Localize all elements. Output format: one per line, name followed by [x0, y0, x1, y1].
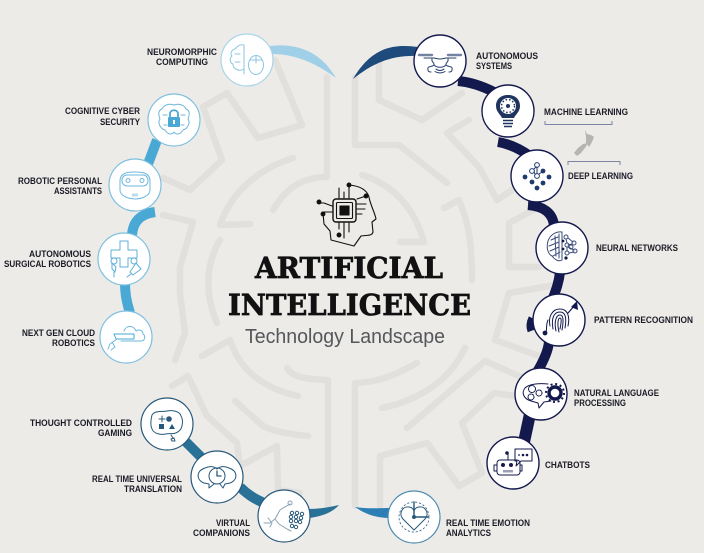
subtitle: Technology Landscape: [245, 326, 445, 348]
heading: Intelligence: INTELLIGENCE: [228, 288, 471, 322]
label: THOUGHT CONTROLLED: [30, 418, 132, 428]
icon: drone: [414, 35, 466, 87]
icon: robot with speech bubble: [487, 437, 539, 489]
icon: cloud and robot arm: [100, 311, 152, 363]
icon: dot network: [511, 150, 563, 202]
node: natural language processing: [515, 368, 659, 420]
label: COGNITIVE CYBER: [65, 106, 140, 116]
icon: medical cross and robot arms: [98, 233, 150, 285]
node: real time emotion analytics: ANALYTICS: [446, 528, 491, 538]
ribbon: light blue neuromorphic arc: [270, 45, 336, 78]
node: next gen cloud robotics: [22, 311, 152, 363]
icon: brain and mouse: [221, 34, 273, 86]
deep learning bracket: [568, 162, 620, 165]
ribbon: navy autonomous arc: [353, 46, 418, 79]
heading: Artificial: ARTIFICIAL: [254, 251, 443, 285]
label: VIRTUAL: [216, 518, 250, 528]
node: natural language processing: PROCESSING: [574, 398, 626, 408]
label: AUTONOMOUS: [476, 51, 538, 61]
node: real time emotion analytics: [388, 491, 530, 543]
label: REAL TIME EMOTION: [446, 518, 530, 528]
ribbon: blue emotion analytics tail: [355, 507, 392, 518]
node: machine learning: [482, 85, 628, 137]
icon: robot face: [109, 159, 161, 211]
node: autonomous surgical robotics: SURGICAL ROBOTICS: [4, 259, 91, 269]
label: DEEP LEARNING: [568, 171, 633, 181]
node: virtual companions: [193, 490, 310, 542]
icon: AI head with chip: [317, 183, 376, 246]
label: ROBOTIC PERSONAL: [18, 176, 102, 186]
ribbon: teal virtual companions tail: [308, 505, 339, 518]
node: neuromorphic computing: [147, 34, 273, 86]
node: robotic personal assistants: ASSISTANTS: [54, 186, 102, 196]
background brain circuit lines: [163, 57, 555, 506]
node: autonomous systems: [414, 35, 538, 87]
label: CHATBOTS: [545, 460, 590, 470]
icon: heart with clock hands: [388, 491, 440, 543]
icon: brain and network: [536, 222, 588, 274]
icon: speech bubbles and clock: [191, 451, 243, 503]
node: cognitive cyber security: [65, 94, 200, 146]
node: neuromorphic computing: COMPUTING: [156, 57, 208, 67]
node: thought controlled gaming: GAMING: [98, 428, 132, 438]
node: next gen cloud robotics: ROBOTICS: [52, 338, 95, 348]
title group: head icon and headings: [228, 183, 471, 348]
node: virtual companions: COMPANIONS: [193, 528, 250, 538]
ribbon: navy right segments: [458, 81, 560, 442]
label: MACHINE LEARNING: [544, 107, 628, 117]
icon: New Zealand map: [574, 130, 594, 156]
label: NEXT GEN CLOUD: [22, 328, 95, 338]
label: NATURAL LANGUAGE: [574, 388, 659, 398]
node: robotic personal assistants: [18, 159, 161, 211]
node: autonomous systems: SYSTEMS: [476, 61, 512, 71]
label: NEURAL NETWORKS: [596, 243, 678, 253]
node: pattern recognition: [533, 294, 693, 346]
icon: gear light bulb: [482, 85, 534, 137]
node: deep learning: [511, 150, 633, 202]
node: cognitive cyber security: SECURITY: [100, 117, 140, 127]
node: real time universal translation: [92, 451, 243, 503]
node: real time universal translation: TRANSLATION: [124, 484, 182, 494]
ribbon: teal lower left segments: [186, 442, 264, 503]
icon: talking head with gears: [515, 368, 567, 420]
machine learning bracket: [545, 121, 612, 124]
ribbon: blue left segments: [125, 140, 157, 313]
label: PATTERN RECOGNITION: [594, 315, 693, 325]
label: AUTONOMOUS: [29, 249, 91, 259]
node: autonomous surgical robotics: [4, 233, 150, 285]
node: neural networks: [536, 222, 678, 274]
icon: brain with lock: [148, 94, 200, 146]
icon: fingerprint with arrow: [533, 294, 585, 346]
icon: digital hand: [258, 490, 310, 542]
label: REAL TIME UNIVERSAL: [92, 474, 182, 484]
node: thought controlled gaming: [30, 398, 193, 450]
node: chatbots: [487, 437, 590, 489]
label: NEUROMORPHIC: [147, 47, 217, 57]
icon: thought cloud with shapes: [141, 398, 193, 450]
